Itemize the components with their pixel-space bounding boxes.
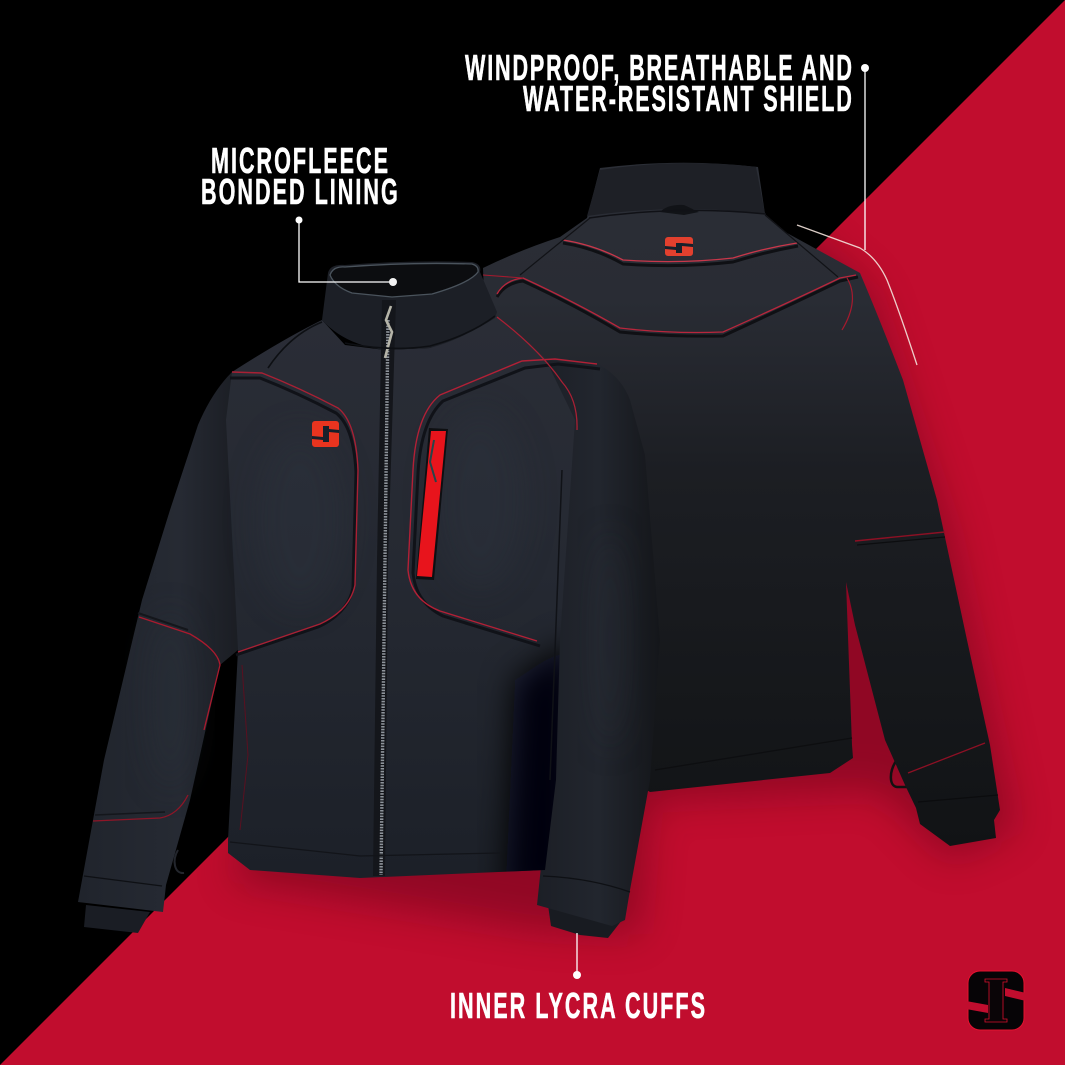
heading: microfleece text bbox=[201, 141, 398, 212]
heading: windproof text: WINDPROOF, BREATHABLE AND bbox=[465, 48, 852, 88]
shadow on body beside right sleeve bbox=[491, 638, 560, 872]
back collar base seam bbox=[589, 210, 766, 218]
leader line vertical bbox=[864, 68, 866, 250]
heading: windproof text bbox=[465, 48, 852, 119]
right sleeve bbox=[537, 360, 660, 926]
callout: lycra cuffs bbox=[450, 933, 705, 1026]
red chest zipper pocket bbox=[416, 428, 448, 580]
front view jacket bbox=[78, 261, 660, 938]
back view jacket bbox=[483, 163, 1000, 846]
cuff loop left bbox=[175, 850, 184, 873]
callout: windproof shield bbox=[465, 48, 917, 365]
zipper teeth bbox=[381, 320, 388, 875]
back yoke piping bbox=[483, 215, 998, 802]
zipper pull bbox=[385, 306, 392, 358]
fabric highlights bbox=[145, 410, 628, 790]
leader dot end bbox=[389, 278, 397, 286]
zipper tape bbox=[373, 300, 396, 876]
brand logo bbox=[966, 971, 1026, 1030]
heading: cuffs text: INNER LYCRA CUFFS bbox=[450, 986, 705, 1026]
back jacket cuff loop bbox=[891, 761, 909, 787]
left sleeve bbox=[78, 372, 262, 912]
jacket drop shadow on red bbox=[230, 230, 1015, 935]
inner cuff left bbox=[84, 905, 150, 933]
collar hanger tab bbox=[660, 205, 699, 215]
leader line bbox=[576, 933, 578, 975]
callout: microfleece lining bbox=[201, 141, 398, 286]
shield curve line bbox=[797, 225, 917, 365]
heading: microfleece text: MICROFLEECE bbox=[211, 141, 388, 181]
heading: microfleece text: BONDED LINING bbox=[201, 172, 398, 212]
body stitching bbox=[84, 316, 630, 892]
collar fleece interior bbox=[330, 263, 478, 297]
back collar panel bbox=[587, 163, 765, 216]
back embroidered logo bbox=[665, 237, 693, 256]
leader line bbox=[299, 220, 393, 282]
body bbox=[226, 316, 575, 878]
leader dot bbox=[573, 971, 581, 979]
heading: windproof text: WATER-RESISTANT SHIELD bbox=[523, 79, 852, 119]
leader dot bbox=[861, 64, 869, 72]
back jacket body and sleeve silhouette bbox=[483, 163, 1000, 846]
chest embroidered logo bbox=[312, 421, 339, 447]
back jacket lower hem seam bbox=[655, 738, 852, 770]
leader dot top bbox=[296, 216, 302, 224]
inner cuff right bbox=[548, 900, 622, 938]
collar bbox=[322, 261, 497, 350]
